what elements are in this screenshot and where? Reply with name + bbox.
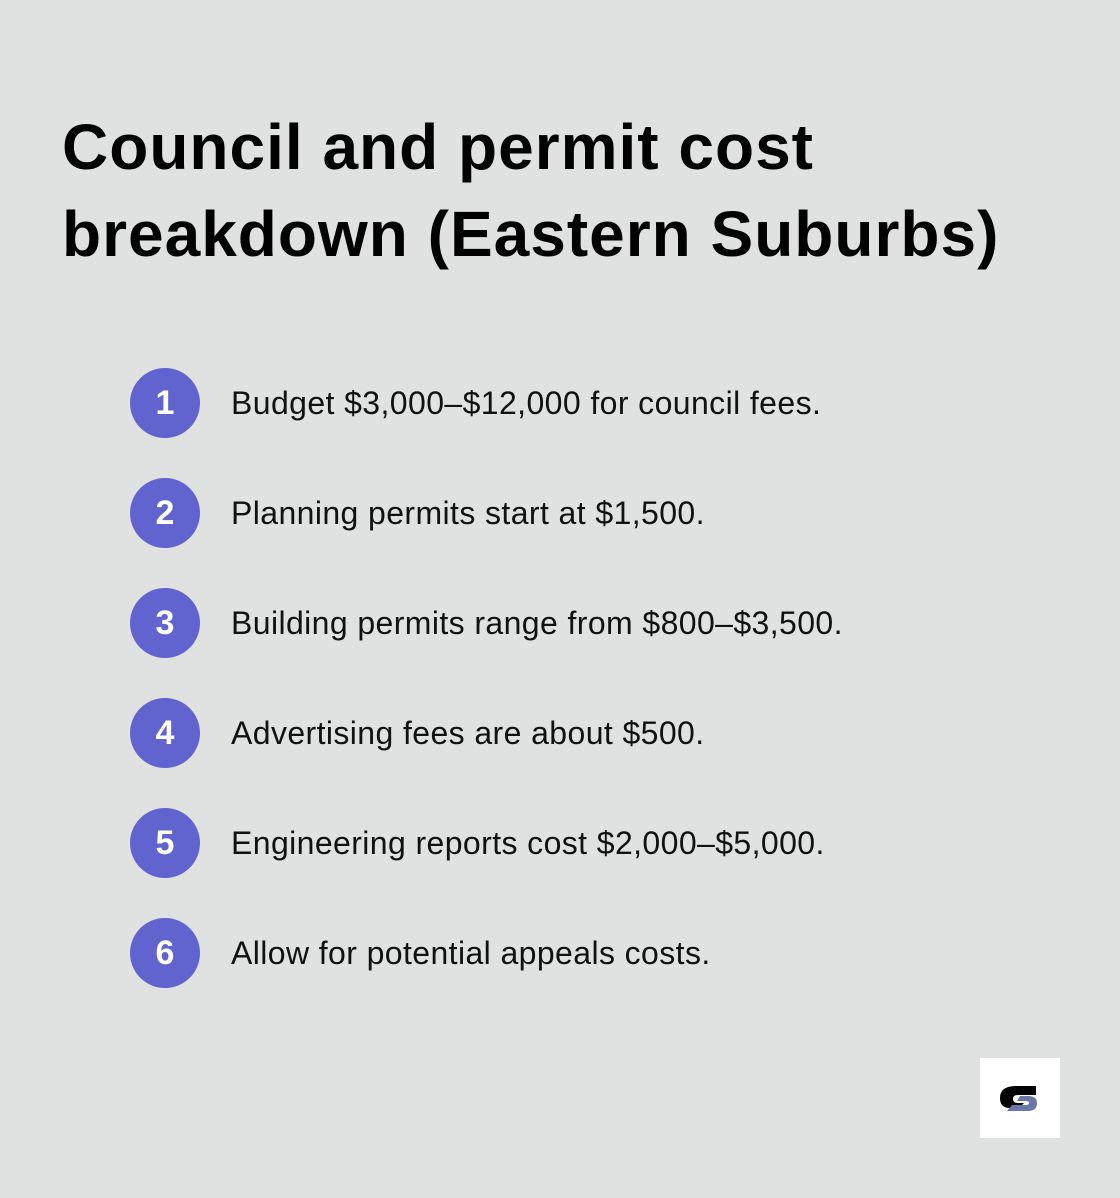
item 6 (130, 918, 711, 988)
item 1: Budget $3,000–$12,000 for council fees. (231, 385, 821, 421)
item 5: Engineering reports cost $2,000–$5,000. (231, 825, 825, 861)
item 3 (130, 588, 843, 658)
title: breakdown (Eastern Suburbs) (62, 198, 999, 270)
title (62, 111, 999, 270)
title: Council and permit cost (62, 111, 814, 183)
item 3: Building permits range from $800–$3,500. (231, 605, 843, 641)
item 4: 4 (156, 714, 174, 752)
logo (980, 1058, 1060, 1138)
item 4: Advertising fees are about $500. (231, 715, 705, 751)
item 2 (130, 478, 705, 548)
item 5: 5 (156, 824, 174, 862)
item 4 (130, 698, 705, 768)
item 2: Planning permits start at $1,500. (231, 495, 705, 531)
item 2: 2 (156, 494, 174, 532)
item 1: 1 (156, 384, 174, 422)
item 1 (130, 368, 821, 438)
item 6: Allow for potential appeals costs. (231, 935, 711, 971)
item 3: 3 (156, 604, 174, 642)
item 6: 6 (156, 934, 174, 972)
item 5 (130, 808, 825, 878)
